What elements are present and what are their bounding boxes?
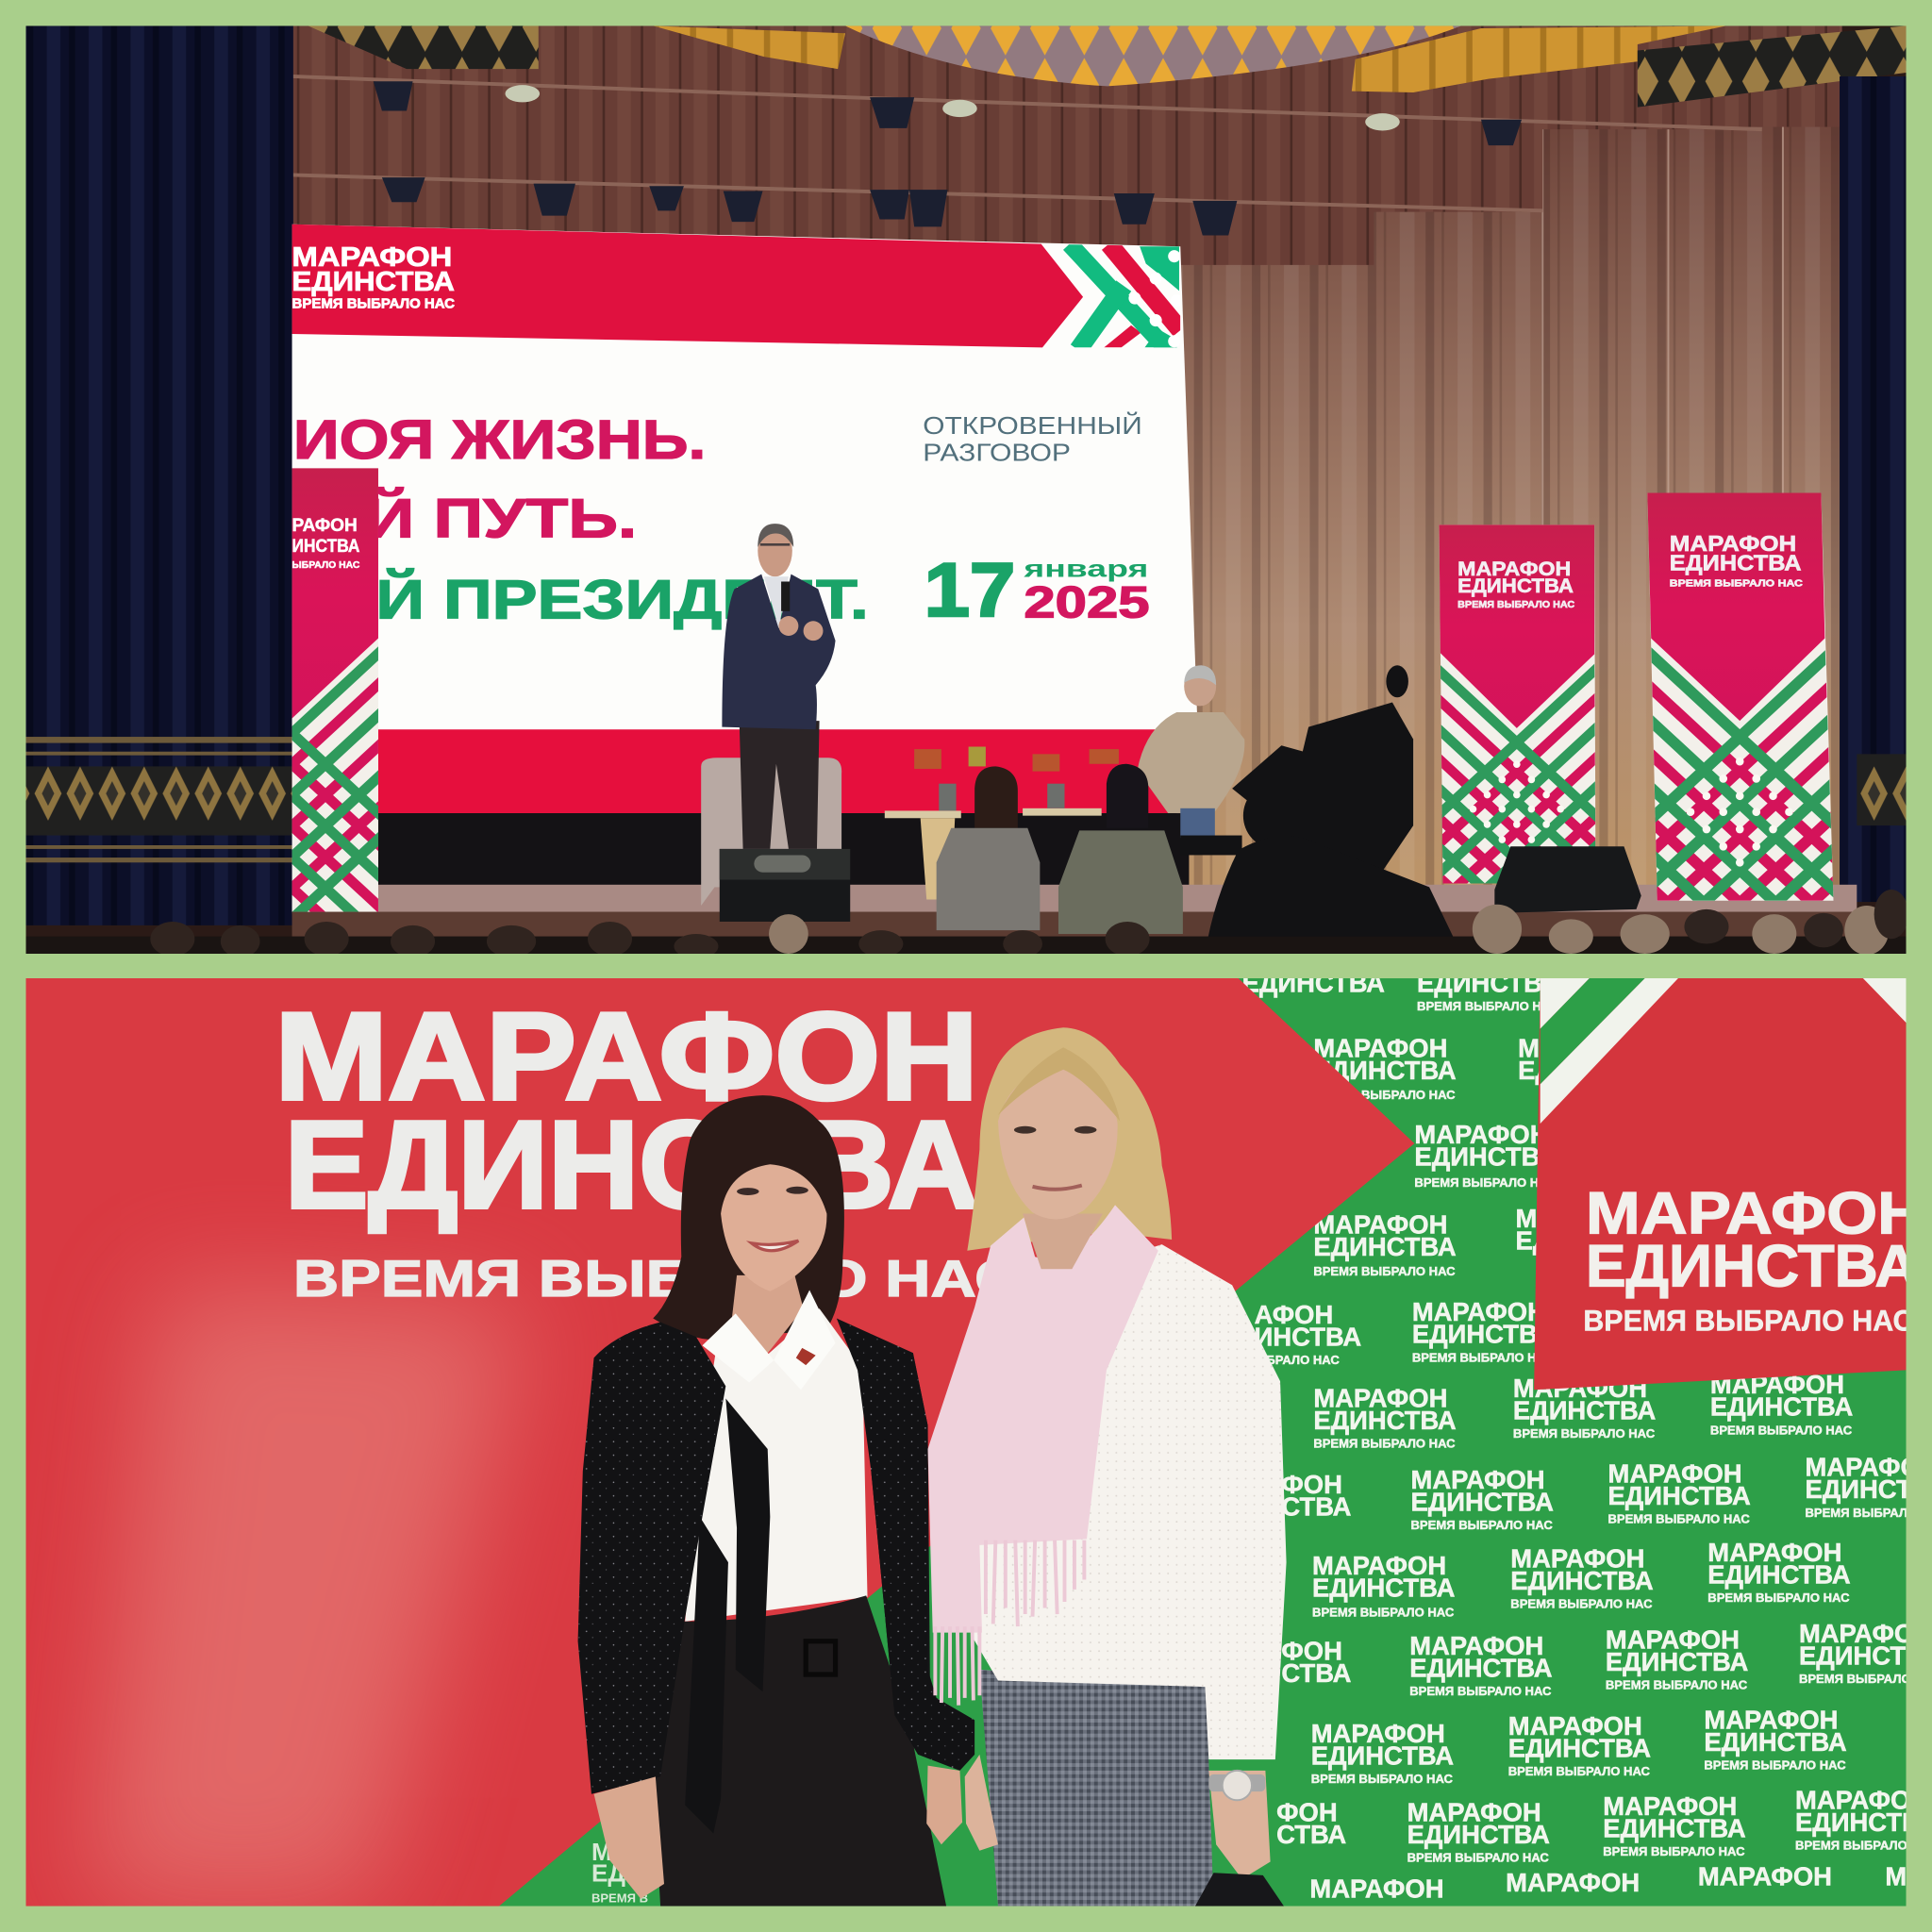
- repeated wall logos: МАРАФОН: [1311, 1719, 1445, 1748]
- screen date: [928, 562, 1149, 619]
- repeated wall logos: ВРЕМЯ ВЫБРАЛО НАС: [1513, 1426, 1656, 1441]
- repeated wall logos: ВРЕМЯ ВЫБРАЛО НАС: [1313, 1088, 1456, 1102]
- left banner: ЫБРАЛО НАС: [292, 560, 360, 571]
- repeated wall logos: СТВА: [1281, 1658, 1352, 1688]
- repeated wall logos: ЕДИНСТВА: [1242, 968, 1385, 997]
- repeated wall logos: ВРЕМЯ ВЫБРАЛО НАС: [1607, 1511, 1750, 1525]
- repeated wall logos: МАРАФОН: [1707, 1538, 1841, 1567]
- repeated wall logos: ФОН: [1281, 1636, 1342, 1665]
- repeated wall logos: ВРЕМЯ ВЫБРАЛО НАС: [1707, 1591, 1850, 1605]
- left woman face: [721, 1164, 826, 1291]
- corner red logo panel: [1534, 978, 1924, 1390]
- repeated wall logos: ЕДИНСТВА: [1607, 1481, 1751, 1510]
- repeated wall logos: МА: [1516, 1204, 1556, 1233]
- repeated wall logos: МАРАФОН: [1508, 1711, 1642, 1740]
- upper valance: [292, 25, 1842, 265]
- held black item: [1195, 1873, 1284, 1907]
- seated guest: [1138, 665, 1244, 838]
- ceiling ornament: [308, 25, 1907, 108]
- repeated wall logos: МАРАФОН: [1309, 1874, 1444, 1903]
- screen subheading: [924, 411, 1140, 461]
- repeated wall logos: МАРАФОН: [1513, 1374, 1647, 1403]
- repeated wall logos: ВРЕМЯ ВЫБРАЛО НАС: [1510, 1596, 1653, 1610]
- repeated wall logos: ВРЕМЯ ВЫБРАЛО НАС: [1606, 1678, 1748, 1692]
- repeated wall logos: МАРАФОН: [1412, 1297, 1546, 1326]
- repeated wall logos: ВРЕМЯ ВЫБРАЛО НАС: [1313, 1264, 1456, 1278]
- right tan curtains: [1176, 124, 1848, 906]
- repeated wall logos: ВРЕМЯ ВЫБРАЛО НАС: [1312, 1606, 1455, 1620]
- repeated wall logos: ЕДИНСТВА: [1710, 1392, 1853, 1422]
- woman left: [578, 1095, 974, 1907]
- repeated wall logos: МАРАФОН: [1313, 1034, 1447, 1063]
- repeated wall logos: ВРЕМЯ ВЫБРАЛО НАС: [1407, 1851, 1549, 1865]
- repeated wall logos: ЕДИНСТВА: [1606, 1647, 1748, 1676]
- seated audience on stage: [937, 764, 1183, 934]
- repeated wall logos: ВРЕМЯ ВЫБРАЛО НАС: [1508, 1764, 1651, 1778]
- right woman hands: [965, 1755, 998, 1851]
- repeated wall logos: МАРАФОН: [1409, 1631, 1543, 1660]
- screen logo: МАРАФОН: [292, 242, 452, 273]
- screen logo: [292, 246, 455, 308]
- man shirt: [764, 576, 789, 628]
- screen date: января: [1023, 557, 1148, 582]
- screen subheading: ОТКРОВЕННЫЙ: [923, 411, 1142, 440]
- left woman smile: [752, 1241, 798, 1251]
- repeated wall logos: ВРЕМЯ ВЫБРАЛО НАС: [1704, 1758, 1846, 1773]
- screen date: 2025: [1024, 576, 1150, 626]
- audience heads: [25, 890, 1908, 958]
- repeated wall logos: ИНСТВА: [1255, 1322, 1361, 1351]
- repeated wall logos: ЕДИНСТВА: [1411, 1487, 1554, 1516]
- right woman eyes: [1014, 1126, 1096, 1134]
- camera operator: [1180, 665, 1461, 954]
- repeated wall logos: ЕДИНСТВА: [1417, 968, 1560, 997]
- small logo bottom-left of green wedge: МА: [591, 1838, 630, 1866]
- repeated wall logos: ЫБРАЛО НАС: [1255, 1353, 1340, 1367]
- repeated wall logos: МАРАФОН: [1704, 1705, 1838, 1734]
- man hands: [778, 616, 798, 636]
- repeated wall logos: МАРАФОН: [1313, 1209, 1447, 1239]
- repeated wall logos: МАРАФОН: [1799, 1619, 1932, 1648]
- left woman jacket: [578, 1322, 725, 1794]
- left woman bag strap: [862, 1349, 930, 1715]
- repeated wall logos: ЕДИНСТВА: [1704, 1727, 1847, 1757]
- repeated wall logos: ВРЕМЯ ВЫБРАЛО НАС: [1412, 1350, 1555, 1364]
- screen ornament: [1070, 244, 1183, 359]
- repeated wall logos: МА: [1518, 1034, 1558, 1063]
- backdrop light glow: [86, 1281, 530, 1907]
- stage floor: [292, 885, 1857, 914]
- corner logo text: ВРЕМЯ ВЫБРАЛО НАС: [1583, 1305, 1913, 1338]
- right woman sweater: [974, 1244, 1287, 1759]
- banner far right: МАРАФОН: [1670, 531, 1796, 556]
- repeated wall logos: МАРАФОН: [1414, 1120, 1549, 1149]
- repeated wall logos: ЕДИНСТВА: [1313, 1056, 1457, 1085]
- repeated wall logos: МАРАФОН: [1606, 1625, 1740, 1655]
- corner logo text: МАРАФОН: [1586, 1180, 1924, 1246]
- LED screen: [292, 225, 1198, 813]
- repeated wall logos: МАРАФОН: [1506, 1868, 1640, 1897]
- repeated wall logos: ВРЕМЯ ВЫБРАЛО НАС: [1603, 1844, 1745, 1858]
- repeated wall logos: МАРАФОН: [1313, 1384, 1447, 1413]
- woman right: [928, 1027, 1287, 1907]
- repeated wall logos: [1242, 968, 1932, 1903]
- dark stage rear: [375, 813, 1189, 887]
- right woman scarf: [928, 1205, 1158, 1633]
- screen date: 17: [924, 548, 1015, 633]
- backdrop headline: [275, 987, 1020, 1307]
- repeated wall logos: ВРЕМЯ ВЫБРАЛО НАС: [1311, 1772, 1454, 1786]
- backdrop headline: ВРЕМЯ ВЫБРАЛО НАС: [293, 1249, 1020, 1307]
- repeated wall logos: МАРАФОН: [1603, 1791, 1737, 1821]
- left woman badge: [796, 1348, 816, 1365]
- repeated wall logos: ЕД: [1516, 1225, 1552, 1255]
- photo: stage event: [25, 25, 1907, 954]
- right woman trousers: [979, 1670, 1214, 1907]
- left banner: ИНСТВА: [292, 536, 359, 557]
- repeated wall logos: МАРАФОН: [1698, 1861, 1832, 1890]
- repeated wall logos: МАРАФОН: [1407, 1797, 1541, 1826]
- repeated wall logos: АФОН: [1255, 1300, 1333, 1329]
- left woman ribbon: [685, 1398, 770, 1834]
- left woman eyes: [737, 1187, 808, 1195]
- right woman mouth: [1033, 1185, 1082, 1190]
- left navy curtain: [25, 25, 293, 925]
- repeated wall logos: ЕДИНСТВА: [1513, 1396, 1656, 1425]
- banner centre right: ЕДИНСТВА: [1457, 575, 1574, 597]
- repeated wall logos: ЕДИНСТВА: [1313, 1406, 1457, 1435]
- left banner: РАФОН: [292, 515, 358, 536]
- repeated wall logos: ВРЕМЯ ВЫБРАЛО НАС: [1414, 1175, 1557, 1190]
- repeated wall logos: ЕД: [1518, 1056, 1554, 1085]
- repeated wall logos: ЕДИНСТВА: [1414, 1142, 1557, 1172]
- repeated wall logos: ЕДИНСТВА: [1510, 1566, 1654, 1595]
- stage back wall: [25, 25, 1907, 954]
- repeated wall logos: МАРАФОН: [1312, 1551, 1446, 1580]
- red arrow backdrop: [25, 978, 1414, 1907]
- photo: backdrop with two women: [25, 968, 1932, 1907]
- right woman watch: [1208, 1771, 1265, 1800]
- repeated wall logos: МАРАФОН: [1411, 1465, 1545, 1494]
- repeated wall logos: ЕДИНСТВА: [1311, 1740, 1454, 1770]
- repeated wall logos: МАРАФОН: [1607, 1458, 1742, 1488]
- stage lights: [374, 81, 1522, 235]
- left woman shirt: [685, 1308, 868, 1622]
- repeated wall logos: ЕДИНСТВА: [1707, 1559, 1851, 1589]
- man trousers: [740, 721, 820, 849]
- screen lower red band: [292, 729, 1195, 813]
- tables and flags: [885, 747, 1119, 899]
- small logo bottom-left of green wedge: ЕД: [591, 1858, 625, 1887]
- left woman neck: [732, 1275, 804, 1357]
- screen top red band: [292, 225, 1083, 347]
- repeated wall logos: ВРЕМЯ ВЫБРАЛО НАС: [1313, 1437, 1456, 1451]
- left woman hands: [926, 1766, 962, 1844]
- repeated wall logos: СТВА: [1276, 1820, 1346, 1849]
- corner logo text: ЕДИНСТВА: [1586, 1234, 1919, 1300]
- speaker: presenter man: [722, 524, 836, 849]
- repeated wall logos: ЕДИНСТВА: [1409, 1654, 1553, 1683]
- repeated wall logos: ВРЕМЯ ВЫБРАЛО НАС: [1409, 1684, 1552, 1698]
- repeated wall logos: ЕДИНСТВА: [1312, 1574, 1456, 1603]
- repeated wall logos: ЕДИНСТВА: [1313, 1232, 1457, 1261]
- stage monitor speakers: [720, 846, 1641, 922]
- screen subheading: РАЗГОВОР: [923, 438, 1071, 466]
- left woman collar: [702, 1291, 836, 1390]
- man head: [758, 534, 792, 577]
- left banner: [292, 468, 378, 912]
- repeated wall logos: ЕДИНСТВА: [1412, 1320, 1555, 1349]
- repeated wall logos: ЕДИНСТВА: [1508, 1734, 1651, 1763]
- repeated wall logos: МАРАФОН: [1510, 1543, 1644, 1573]
- repeated wall logos: СТВА: [1281, 1492, 1352, 1522]
- right woman face: [998, 1067, 1118, 1219]
- banner far right: ВРЕМЯ ВЫБРАЛО НАС: [1670, 579, 1803, 590]
- right woman hair: [967, 1027, 1172, 1251]
- screen logo: ЕДИНСТВА: [292, 267, 455, 297]
- banner centre right: [1440, 525, 1596, 883]
- right navy curtain: [1840, 76, 1907, 902]
- white armchair: [701, 758, 841, 906]
- backdrop headline: МАРАФОН: [275, 987, 978, 1125]
- banner centre right: ВРЕМЯ ВЫБРАЛО НАС: [1457, 600, 1575, 610]
- green press wall: [25, 978, 1907, 1907]
- screen headline: Й ПУТЬ.: [365, 486, 637, 549]
- repeated wall logos: МАРАФОН: [1795, 1785, 1929, 1814]
- banner centre right: МАРАФОН: [1457, 558, 1571, 580]
- repeated wall logos: ВРЕМЯ ВЫБРАЛО НАС: [1710, 1423, 1853, 1437]
- corner stripes: [1541, 978, 1590, 1029]
- repeated wall logos: ФОН: [1276, 1797, 1338, 1826]
- repeated wall logos: ВРЕМЯ ВЫБРАЛО НАС: [1417, 999, 1559, 1013]
- repeated wall logos: ЕДИНСТВА: [1407, 1820, 1550, 1849]
- repeated wall logos: МАРАФОН: [1710, 1370, 1844, 1399]
- man suit: [722, 575, 836, 729]
- repeated wall logos: ЕДИНСТВА: [1603, 1813, 1746, 1842]
- screen headline: Й ПРЕЗИДЕНТ.: [375, 568, 869, 631]
- small logo bottom-left of green wedge: ВРЕМЯ В: [591, 1891, 648, 1906]
- right woman fringe bang: [998, 1047, 1120, 1122]
- repeated wall logos: МА: [1885, 1861, 1925, 1890]
- banner far right: ЕДИНСТВА: [1670, 551, 1802, 575]
- repeated wall logos: ВРЕМЯ ВЫБРАЛО НАС: [1411, 1518, 1553, 1532]
- right woman scarf fringe: [935, 1541, 1084, 1706]
- left woman hair: [653, 1095, 844, 1340]
- screen headline: [293, 409, 869, 631]
- screen base: [292, 225, 1197, 730]
- right woman neck: [1023, 1214, 1103, 1269]
- repeated wall logos: ФОН: [1281, 1470, 1342, 1499]
- left woman skirt: [653, 1595, 946, 1907]
- screen headline: ИОЯ ЖИЗНЬ.: [293, 409, 706, 471]
- screen logo: ВРЕМЯ ВЫБРАЛО НАС: [292, 297, 455, 312]
- corner logo text: [1583, 1180, 1924, 1338]
- banner far right: [1647, 492, 1834, 901]
- small logo bottom-left of green wedge: [591, 1838, 648, 1906]
- backdrop headline: ЕДИНСТВА: [285, 1095, 978, 1234]
